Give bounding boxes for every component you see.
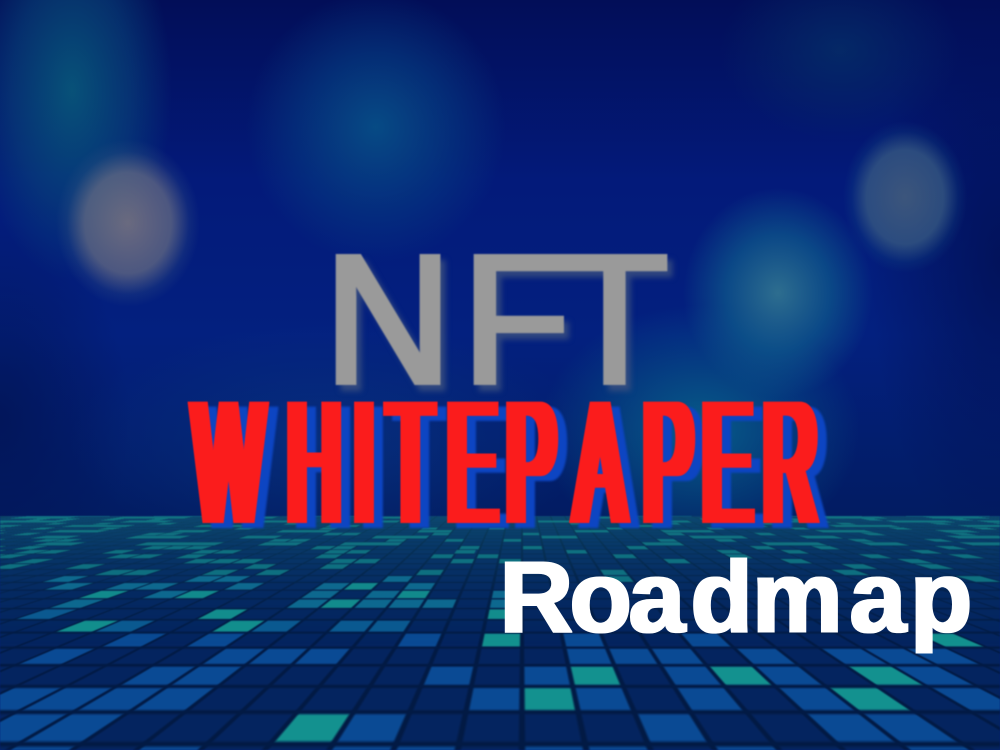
heading: NFT: NFT: [324, 216, 668, 423]
floor tile grid: [0, 516, 1000, 750]
heading: WHITEPAPER: WHITEPAPER: [194, 366, 817, 560]
heading: Roadmap: Roadmap: [500, 540, 972, 654]
horizon haze: [0, 516, 1000, 750]
tiled perspective floor: [0, 516, 1000, 750]
background: blurred bokeh sky: [0, 0, 1000, 516]
